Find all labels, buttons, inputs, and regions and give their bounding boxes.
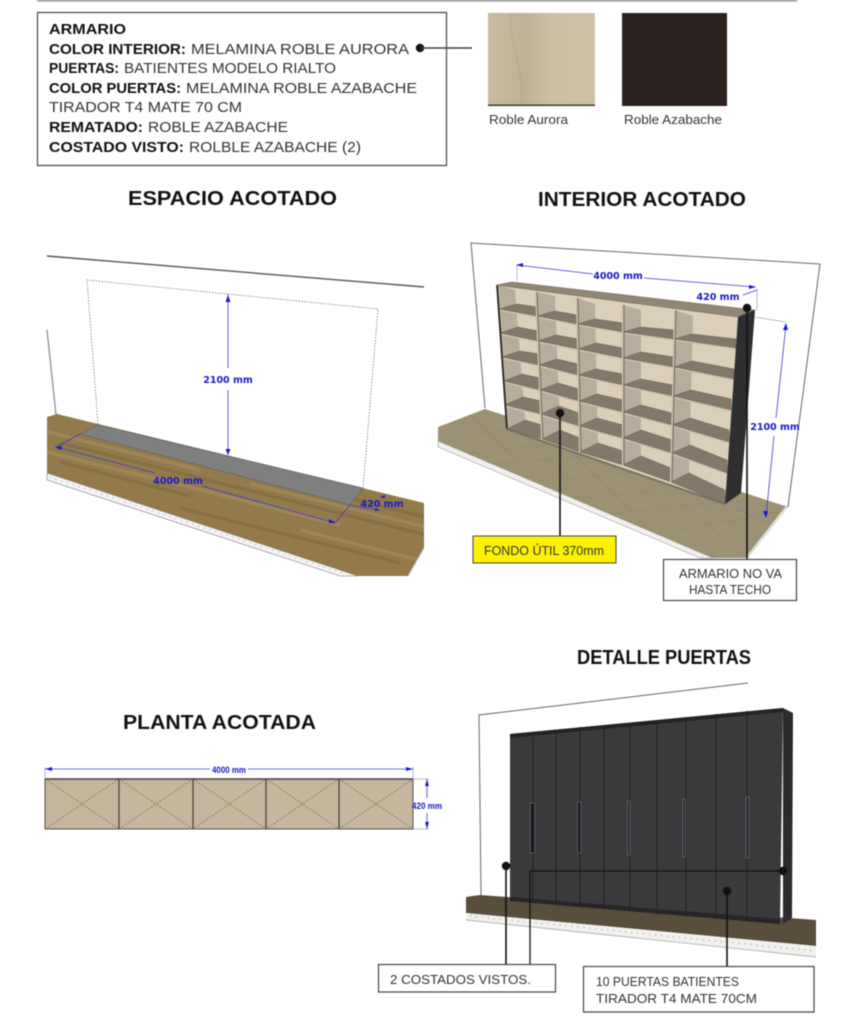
heading: interior acotado: INTERIOR ACOTADO <box>538 189 746 211</box>
dimension: width 4000 mm: 4000 mm <box>212 765 246 775</box>
dimension: depth 420 mm: 420 mm <box>361 499 404 510</box>
callout: armario no va hasta techo: ARMARIO NO VA <box>679 567 783 581</box>
callout: 10 puertas batientes <box>584 887 814 1012</box>
callout: 2 costados vistos <box>378 862 787 992</box>
swatch: Roble Azabache <box>622 13 727 127</box>
dimension: height 2100 mm: 2100 mm <box>750 422 800 433</box>
panel: wardrobe specification: PUERTAS: <box>49 60 119 77</box>
callout: fondo útil <box>473 409 616 563</box>
callout: armario no va hasta techo <box>664 304 796 600</box>
illustration: detalle puertas <box>466 683 816 957</box>
dimension: width 4000 mm <box>516 263 757 310</box>
panel: wardrobe specification: COSTADO VISTO: <box>49 139 184 156</box>
dimension: width 4000 mm: 4000 mm <box>153 476 203 487</box>
callout: 10 puertas batientes: 10 PUERTAS BATIENTES <box>596 975 739 989</box>
callout: 2 costados vistos: 2 COSTADOS VISTOS. <box>390 973 531 987</box>
swatch: Roble Azabache: Roble Azabache <box>624 112 722 127</box>
heading: espacio acotado: ESPACIO ACOTADO <box>128 188 337 210</box>
dimension: width 4000 mm <box>45 765 413 779</box>
dimension: depth 420 mm <box>697 290 757 303</box>
panel: wardrobe specification: TIRADOR T4 MATE 70 CM <box>49 99 242 116</box>
dimension: depth 420 mm <box>412 779 442 829</box>
panel: wardrobe specification: REMATADO: <box>49 119 143 136</box>
panel: wardrobe specification <box>38 12 446 166</box>
dimension: height 2100 mm: 2100 mm <box>203 375 253 386</box>
panel: wardrobe specification: COLOR PUERTAS: <box>49 80 181 97</box>
dimension: width 4000 mm: 4000 mm <box>593 271 643 282</box>
callout: armario no va hasta techo: HASTA TECHO <box>689 583 771 597</box>
callout: connector to swatch <box>416 44 472 52</box>
panel: wardrobe specification: ARMARIO <box>49 21 126 38</box>
illustration: interior acotado <box>438 243 820 560</box>
dimension: height 2100 mm <box>725 317 800 518</box>
swatch: Roble Aurora: Roble Aurora <box>489 112 569 127</box>
callout: 10 puertas batientes: TIRADOR T4 MATE 70CM <box>596 992 757 1006</box>
bookcase dark side panel <box>725 310 755 504</box>
bookcase interior <box>497 282 755 504</box>
panel: wardrobe specification: ROLBLE AZABACHE (2) <box>189 139 361 156</box>
panel: wardrobe specification: MELAMINA ROBLE AZABACHE <box>186 80 417 97</box>
illustration: espacio acotado <box>40 256 430 576</box>
dimension: depth 420 mm <box>350 495 404 511</box>
callout: fondo útil: FONDO ÚTIL 370mm <box>484 543 604 558</box>
door handles <box>530 797 749 858</box>
panel: wardrobe specification: ROBLE AZABACHE <box>148 119 288 136</box>
dimension: width 4000 mm <box>55 434 350 523</box>
illustration: planta acotada <box>45 765 442 829</box>
panel: wardrobe specification: BATIENTES MODELO RIALTO <box>124 60 336 77</box>
wardrobe side <box>783 708 793 924</box>
wardrobe doors <box>510 708 783 924</box>
heading: detalle puertas: DETALLE PUERTAS <box>577 647 751 669</box>
top rule <box>37 0 797 2</box>
panel: wardrobe specification: MELAMINA ROBLE AURORA <box>191 41 409 58</box>
panel: wardrobe specification: COLOR INTERIOR: <box>49 41 186 58</box>
dimension: height 2100 mm <box>203 294 253 455</box>
dimension: depth 420 mm: 420 mm <box>697 292 740 303</box>
dimension: depth 420 mm: 420 mm <box>412 801 442 811</box>
swatch: Roble Aurora <box>488 13 595 127</box>
heading: planta acotada: PLANTA ACOTADA <box>123 712 316 734</box>
